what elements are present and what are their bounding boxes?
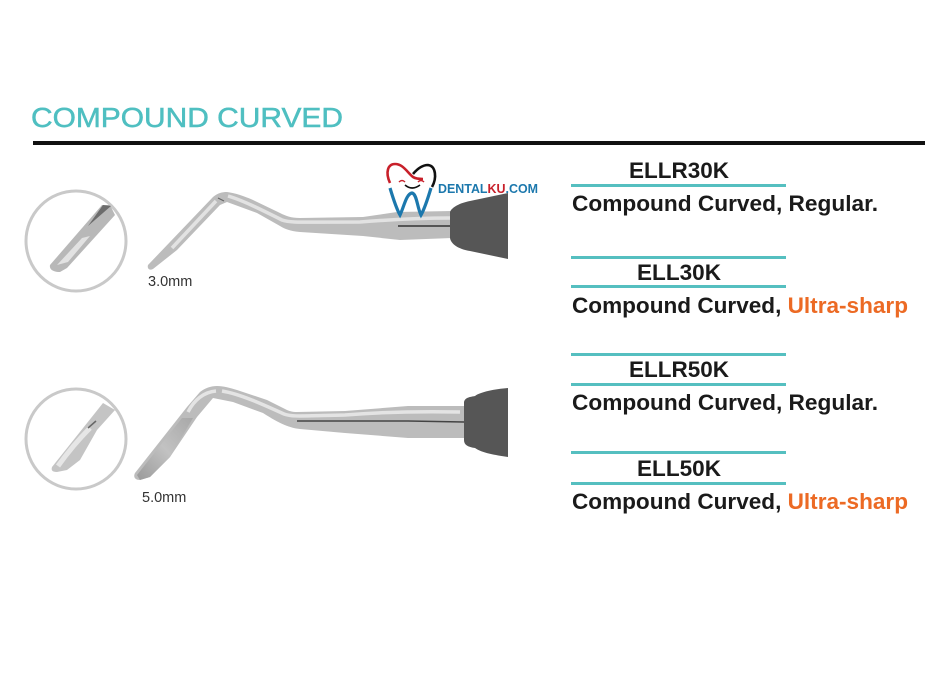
spec: ELLR50K: Compound Curved, Regular. xyxy=(572,390,878,415)
detail circle: 5.0mm tip xyxy=(26,389,126,489)
groove xyxy=(398,225,452,227)
highlights 3.0mm xyxy=(172,196,450,248)
spec: ELLR50K: ELLR50K xyxy=(629,357,729,382)
handle xyxy=(464,388,508,457)
spec: ELLR30K xyxy=(571,158,878,216)
instrument: 5.0mm xyxy=(134,386,508,480)
wordmark: DENTALKU.COM xyxy=(438,181,538,196)
shaft 5.0mm xyxy=(134,386,465,480)
spec: ELL30K: ELL30K xyxy=(637,260,721,285)
blade shading xyxy=(137,418,193,480)
title: COMPOUND CURVED xyxy=(31,102,343,133)
spec: ELLR30K: ELLR30K xyxy=(629,158,729,183)
tooth xyxy=(388,164,423,183)
detail circle: 3.0mm tip xyxy=(26,191,126,291)
highlights 5.0mm xyxy=(188,391,460,416)
groove xyxy=(297,421,464,422)
label: 3.0mm: 3.0mm xyxy=(148,274,192,290)
spec: ELL30K: Compound Curved, Ultra-sharp xyxy=(572,293,908,318)
spec: ELL50K: ELL50K xyxy=(637,456,721,481)
instrument: 3.0mm xyxy=(148,192,508,270)
spec: ELLR50K xyxy=(571,353,878,415)
logo: Dentalku xyxy=(388,164,538,215)
header rule xyxy=(33,141,925,145)
spec: ELL30K xyxy=(571,256,908,318)
spec: ELLR30K: Compound Curved, Regular. xyxy=(572,191,878,216)
spec: ELL50K: Compound Curved, Ultra-sharp xyxy=(572,489,908,514)
spec: ELL50K xyxy=(571,451,908,514)
shaft 3.0mm xyxy=(148,192,452,270)
label: 5.0mm: 5.0mm xyxy=(142,490,186,506)
handle xyxy=(450,193,508,259)
